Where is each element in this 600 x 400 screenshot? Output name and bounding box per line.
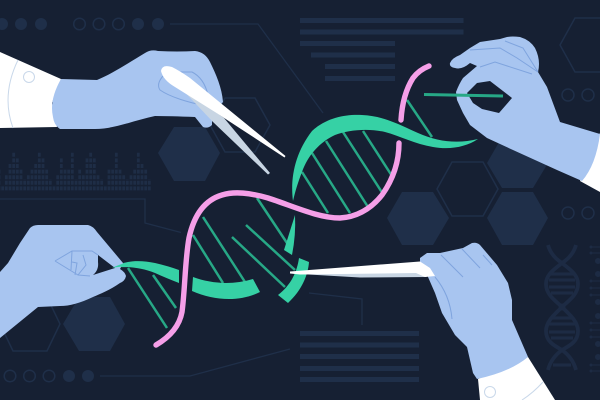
bottom right hand with tweezers [290,243,555,400]
lab coat sleeve [478,357,555,400]
text-like bars top [300,18,464,81]
finger contour lines [55,251,98,276]
lab coat sleeve [0,52,61,128]
green strand segment c [192,277,260,299]
green strand upper ribbon [292,115,478,201]
DNA fragment held by fingers [424,94,503,96]
circuit lines [0,24,362,376]
icon: small DNA [546,245,578,370]
bottom left hand pinching strand [0,225,130,338]
gap between finger and thumb [93,255,115,275]
tweezer upper arm [290,262,435,277]
green strand segment b [278,258,309,303]
top left hand with tweezers [0,50,286,175]
sleeve seam and button [484,382,543,400]
tweezer lower arm shadow [300,272,427,278]
glove [52,50,223,129]
tweezer front arm [161,66,286,158]
side node column [590,246,600,372]
glove with finger loop [450,36,600,181]
pink strand main [156,143,399,345]
bottom dot row [4,370,94,382]
filled hexagons [63,127,548,351]
text-like bars bottom [300,331,419,382]
DNA helix [112,66,478,345]
dot matrix equalizer [0,152,149,190]
top dot row [0,18,164,30]
sleeve seam and button [8,60,34,128]
glove [420,243,528,379]
lab coat sleeve [580,133,600,192]
outlined circle pairs [562,89,594,219]
top right hand holding DNA fragment [424,36,600,192]
finger creases [470,41,538,74]
base pair rungs [128,100,432,328]
glove [0,225,126,338]
strand end pinched by fingers [112,262,130,268]
green strand segment d (drawn with left hand below) [112,261,179,283]
pink strand upper segment [401,66,429,120]
tweezer rear arm [178,85,270,174]
green strand segment a [284,215,295,255]
finger contour [159,72,208,105]
finger creases [435,249,492,319]
